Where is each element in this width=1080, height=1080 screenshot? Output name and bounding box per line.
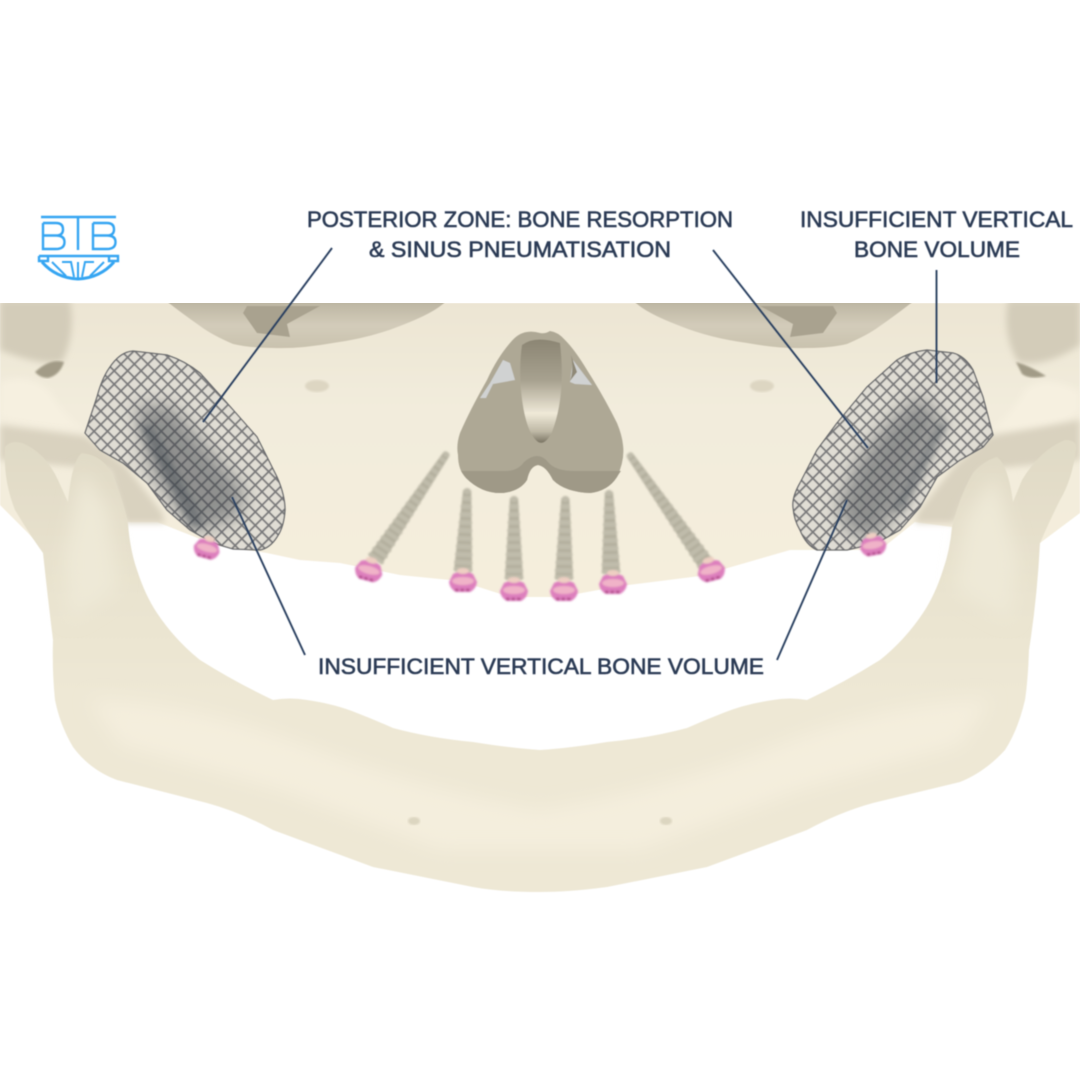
- arch hollow: right: [1016, 362, 1046, 378]
- logo letter B left: [43, 223, 64, 249]
- cheek arch highlight: left: [0, 379, 85, 430]
- socket inner shade: left: [243, 306, 320, 337]
- cheek arch highlight: right: [990, 381, 1080, 432]
- skull upper jaw bone: [0, 300, 1080, 597]
- implant 4: [550, 496, 578, 601]
- zygomatic implants: [353, 447, 727, 601]
- temporal shade: right: [1006, 300, 1080, 363]
- label: insufficient vertical bone volume, bottom: INSUFFICIENT VERTICAL BONE VOLUME: [318, 654, 764, 679]
- foramen: right: [750, 380, 774, 392]
- logo letter B right: [93, 223, 116, 249]
- foramen: left: [305, 380, 329, 392]
- implant 1: [353, 447, 455, 584]
- right shadow core: [838, 395, 942, 540]
- logo bridge deck: [39, 256, 118, 261]
- ramus highlight: left: [64, 470, 118, 620]
- implant head: far left: [191, 533, 223, 562]
- nasal floor: [461, 456, 621, 493]
- label: insufficient vertical bone volume, top right: [800, 207, 1073, 262]
- temporal shade: left: [0, 300, 72, 363]
- socket inner shade: right: [760, 306, 837, 337]
- jaw body highlight: [90, 700, 990, 850]
- nasal cavity: [457, 331, 623, 493]
- logo: BTB bridge: [39, 217, 118, 279]
- label: insufficient vertical bone volume, top right: BONE VOLUME: [854, 237, 1020, 262]
- label: posterior zone: [307, 207, 733, 262]
- eye socket: left: [165, 300, 447, 348]
- chin foramen: left: [408, 817, 420, 825]
- implant head: far right: [858, 531, 888, 558]
- behind jaw shade: left: [0, 425, 165, 523]
- ramus highlight: right: [955, 475, 1018, 620]
- leader: vertical volume bottom right: [777, 500, 847, 660]
- chin foramen: right: [660, 817, 672, 825]
- label: posterior zone: & SINUS PNEUMATISATION: [369, 237, 671, 262]
- infographic canvas: [0, 210, 1080, 892]
- lower jaw bone: [5, 440, 1076, 892]
- arch hollow: left: [35, 361, 64, 378]
- implant 2: [449, 488, 477, 592]
- logo bridge arch: [42, 262, 114, 279]
- leader lines: [203, 248, 936, 660]
- left shadow core: [135, 405, 245, 530]
- mesh patch: right: [785, 345, 1000, 555]
- leader: vertical volume bottom left: [232, 497, 305, 655]
- eye socket: right: [633, 300, 915, 348]
- implant 3: [500, 496, 528, 601]
- implant 6: [621, 448, 727, 584]
- leader: posterior zone left: [203, 248, 332, 422]
- mesh patch: left: [80, 345, 290, 555]
- nasal septum: [520, 339, 562, 443]
- behind jaw shade: right: [915, 420, 1080, 523]
- leader: posterior zone right: [713, 250, 868, 448]
- nasal bluish panels: [480, 360, 515, 398]
- leader: vertical volume top right: [936, 270, 938, 383]
- label: insufficient vertical bone volume, top right: INSUFFICIENT VERTICAL: [800, 207, 1073, 232]
- label: posterior zone: POSTERIOR ZONE: BONE RESORPTION: [307, 207, 733, 232]
- implant 5: [599, 490, 627, 594]
